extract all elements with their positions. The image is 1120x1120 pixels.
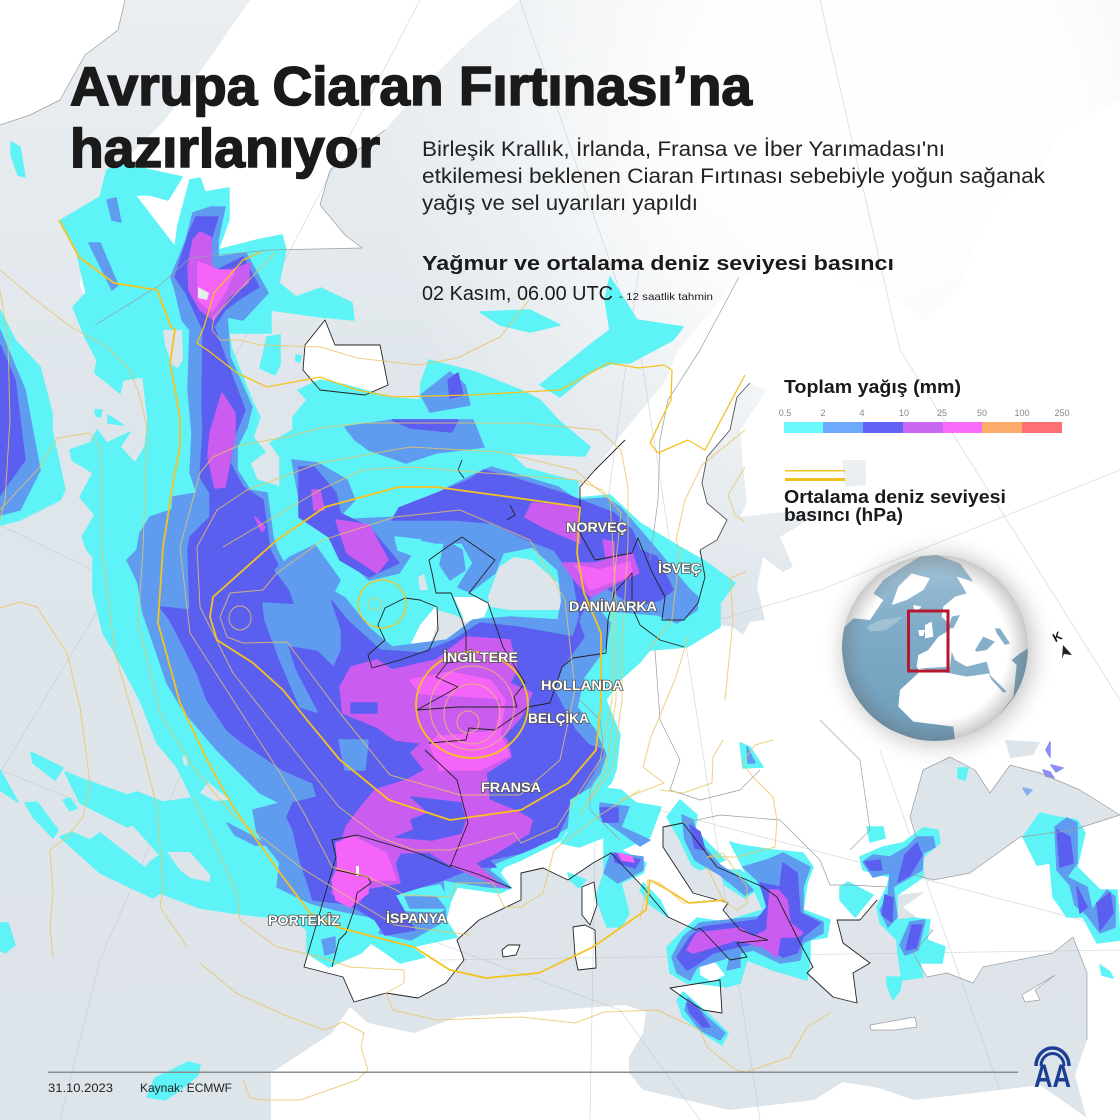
legend: total precipitation: 2 [820,408,826,418]
country labels: PORTEKİZ [268,913,340,928]
intro text: yağış ve sel uyarıları yapıldı [422,192,698,215]
rainfall: 2-4 mm class [127,207,698,940]
country labels: İSPANYA [386,911,447,926]
rainfall: northern italy and corsica [561,743,763,927]
intro text: etkilemesi beklenen Ciaran Fırtınası sebebiyle yoğun sağanak [422,165,1046,188]
legend: total precipitation: 0.5 [779,408,791,418]
white fade over the arctic and north-east [0,0,1120,640]
legend: sea level pressure: basıncı (hPa) [784,505,903,525]
country labels: HOLLANDA [541,678,623,693]
country labels [268,520,701,928]
country labels: İNGİLTERE [443,650,518,665]
country labels: FRANSA [481,780,541,795]
rainfall: aegean and western turkey [840,827,945,1000]
map subtitle: - 12 saatlik tahmin [619,291,713,303]
intro text: Birleşik Krallık, İrlanda, Fransa ve İber Yarımadası'nı [422,138,945,161]
rainfall: west atlantic band [0,142,200,1100]
icon: agency logo: AA [1034,1058,1071,1094]
north arrow [1050,628,1072,659]
north arrow: K [1050,628,1065,645]
rainfall: eastern turkey [958,742,1120,978]
map subtitle: Yağmur ve ortalama deniz seviyesi basıncı [422,253,894,275]
country labels: İSVEÇ [658,561,701,576]
country labels: BELÇİKA [528,711,589,726]
icon: agency logo [1034,1048,1071,1094]
pressure isobars [0,220,830,1100]
footer date and source: Kaynak: ECMWF [140,1081,232,1095]
legend: total precipitation: 10 [899,408,909,418]
legend: total precipitation: 100 [1014,408,1030,418]
map subtitle: 02 Kasım, 06.00 UTC [422,283,613,305]
legend: total precipitation: Toplam yağış (mm) [784,377,961,397]
country labels: DANİMARKA [569,599,657,614]
legend: total precipitation: 25 [937,408,947,418]
rainfall: blue pockets inside the swirl [263,467,465,770]
title: hazırlanıyor [70,117,380,179]
title [70,55,752,179]
legend: total precipitation: 50 [977,408,987,418]
rainfall: 4-10 mm class [160,217,673,935]
footer date and source: 31.10.2023 [48,1081,113,1095]
legend: total precipitation: 4 [859,408,865,418]
footer rule [48,1072,1018,1073]
map subtitle [422,253,894,305]
intro text [422,138,1046,215]
title: Avrupa Ciaran Fırtınası’na [70,55,752,117]
legend: total precipitation: 250 [1054,408,1070,418]
legend: sea level pressure [784,470,1006,525]
rainfall: southern italy and balkans [667,800,830,1045]
rainfall: storm swirl, lowest class [60,163,735,967]
legend: sea level pressure: Ortalama deniz seviyesi [784,487,1006,507]
rainfall: 25-50 mm class [198,262,632,907]
rainfall: 10-25 mm class [188,232,639,907]
legend: total precipitation [779,377,1070,433]
country labels: NORVEÇ [566,520,627,535]
rainfall: northern blue bands [89,198,484,955]
locator globe [842,554,1034,746]
footer date and source [48,1081,232,1095]
